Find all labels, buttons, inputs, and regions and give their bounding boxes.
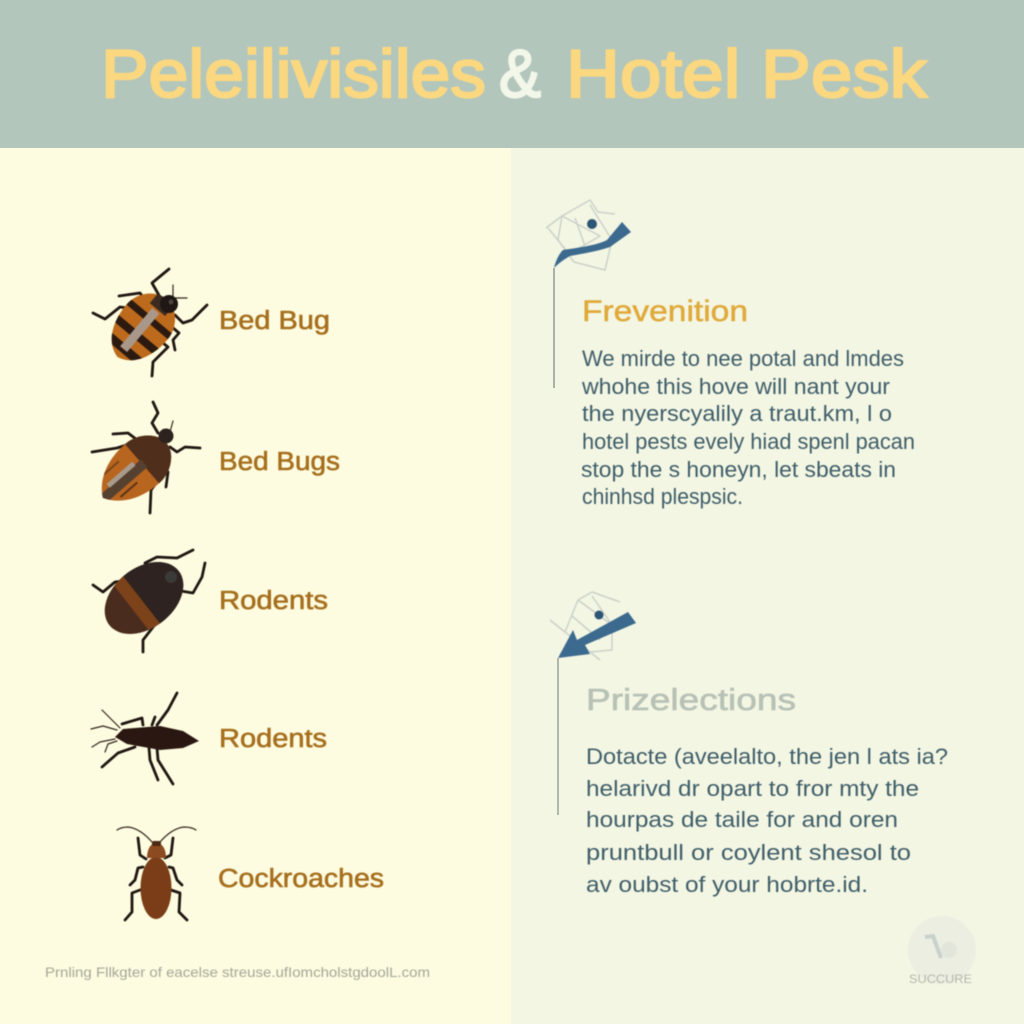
header band bbox=[0, 0, 1024, 148]
icon: dark beetle bbox=[88, 544, 205, 652]
body text: hourpas de taile for and oren bbox=[586, 807, 898, 832]
body text: pruntbull or coylent shesol to bbox=[586, 840, 911, 865]
body text: chinhsd plespsic. bbox=[582, 484, 743, 509]
pest row: bed bug bbox=[91, 269, 330, 381]
title bbox=[101, 36, 928, 112]
label: Bed Bug bbox=[219, 307, 330, 335]
body text: stop the s honeyn, let sbeats in bbox=[581, 457, 896, 482]
vertical rule bbox=[557, 658, 559, 815]
title: & bbox=[499, 36, 541, 112]
heading: Frevenition bbox=[582, 295, 748, 328]
panel: right background bbox=[511, 148, 1024, 1024]
badge: SUCCURE bbox=[909, 974, 972, 986]
body text bbox=[581, 346, 915, 509]
label: Cockroaches bbox=[218, 865, 384, 893]
badge bbox=[908, 916, 976, 986]
pest row: cockroaches bbox=[117, 827, 384, 920]
icon: silverfish-like insect bbox=[91, 693, 199, 784]
heading: Prizelections bbox=[586, 682, 796, 717]
label: Rodents bbox=[219, 725, 327, 753]
icon: cockroach bbox=[117, 827, 196, 920]
body text bbox=[586, 744, 948, 897]
body text: av oubst of your hobrte.id. bbox=[586, 872, 868, 897]
body text: helarivd dr opart to fror mty the bbox=[586, 776, 919, 801]
title: Peleilivisiles bbox=[101, 36, 486, 112]
section: prizelections bbox=[550, 592, 948, 897]
body text: the nyerscyalily a traut.km, l o bbox=[582, 401, 892, 426]
body text: We mirde to nee potal and lmdes bbox=[582, 346, 904, 371]
section: prevention bbox=[546, 200, 915, 509]
pest row: bed bugs bbox=[82, 402, 340, 522]
icon: bed bug bbox=[91, 269, 207, 381]
label: Rodents bbox=[219, 587, 328, 615]
label: Bed Bugs bbox=[219, 448, 340, 476]
title: Hotel Pesk bbox=[566, 36, 928, 112]
source footer: Prnling Fllkgter of eacelse streuse.ufIomcholstgdoolL.com bbox=[45, 964, 430, 980]
body text: whohe this hove will nant your bbox=[581, 374, 890, 399]
icon: arrow with scribble bbox=[550, 592, 636, 660]
pest row: rodents bbox=[88, 544, 328, 652]
panel: left background bbox=[0, 148, 511, 1024]
pest row: rodents 2 bbox=[91, 693, 327, 784]
icon: pen with scribble bbox=[546, 200, 631, 270]
icon: bed bug 2 bbox=[82, 402, 200, 522]
vertical rule bbox=[553, 268, 555, 388]
body text: Dotacte (aveelalto, the jen l ats ia? bbox=[586, 744, 948, 769]
body text: hotel pests evely hiad spenl pacan bbox=[582, 429, 915, 454]
